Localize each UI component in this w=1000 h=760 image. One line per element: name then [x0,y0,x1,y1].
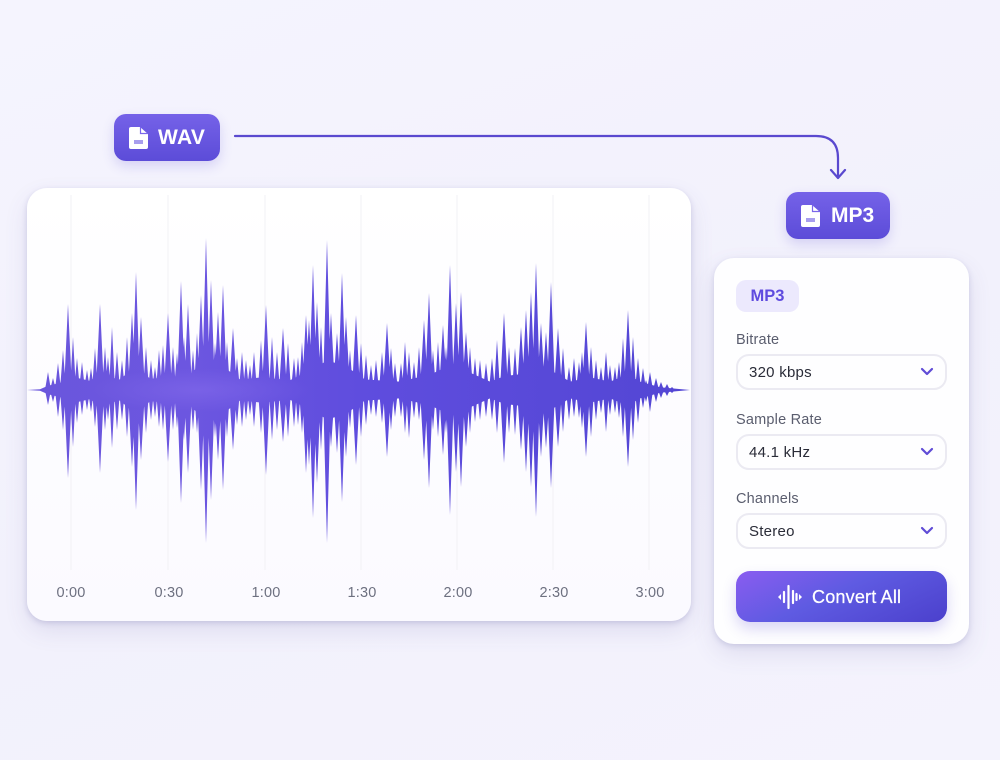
label: Convert All [812,587,901,607]
time axis labels: 2:30 [539,585,569,601]
chevron [920,448,934,456]
label: MP3 [831,204,874,227]
panel: settings [714,258,969,644]
select: bitrate: 320 kbps [749,364,812,381]
icon: file [129,127,148,149]
select: channels [736,513,947,549]
label: bitrate: Bitrate [736,332,779,348]
label: sample rate: Sample Rate [736,412,822,428]
icon: sound wave [778,584,802,610]
time axis labels: 2:00 [443,585,473,601]
select: bitrate [736,354,947,390]
select: sample rate: 44.1 kHz [749,444,810,461]
chevron [920,526,934,534]
icon: file [801,205,820,227]
format tag [736,280,799,312]
panel: waveform [27,188,691,621]
time axis labels: 0:00 [56,585,86,601]
badge: MP3 [786,192,890,239]
time axis labels: 3:00 [635,585,665,601]
time axis labels: 1:30 [347,585,377,601]
label: WAV [158,126,205,149]
time axis labels [56,585,665,601]
label: channels: Channels [736,491,799,507]
time axis labels: 1:00 [251,585,281,601]
select: channels: Stereo [749,523,795,540]
format tag: MP3 [751,287,784,305]
chevron [920,368,934,376]
badge: WAV [114,114,220,161]
button: convert all [736,571,947,622]
arrow: WAV to MP3 [234,134,846,180]
time axis labels: 0:30 [154,585,184,601]
select: sample rate [736,434,947,470]
waveform glow [90,368,310,412]
